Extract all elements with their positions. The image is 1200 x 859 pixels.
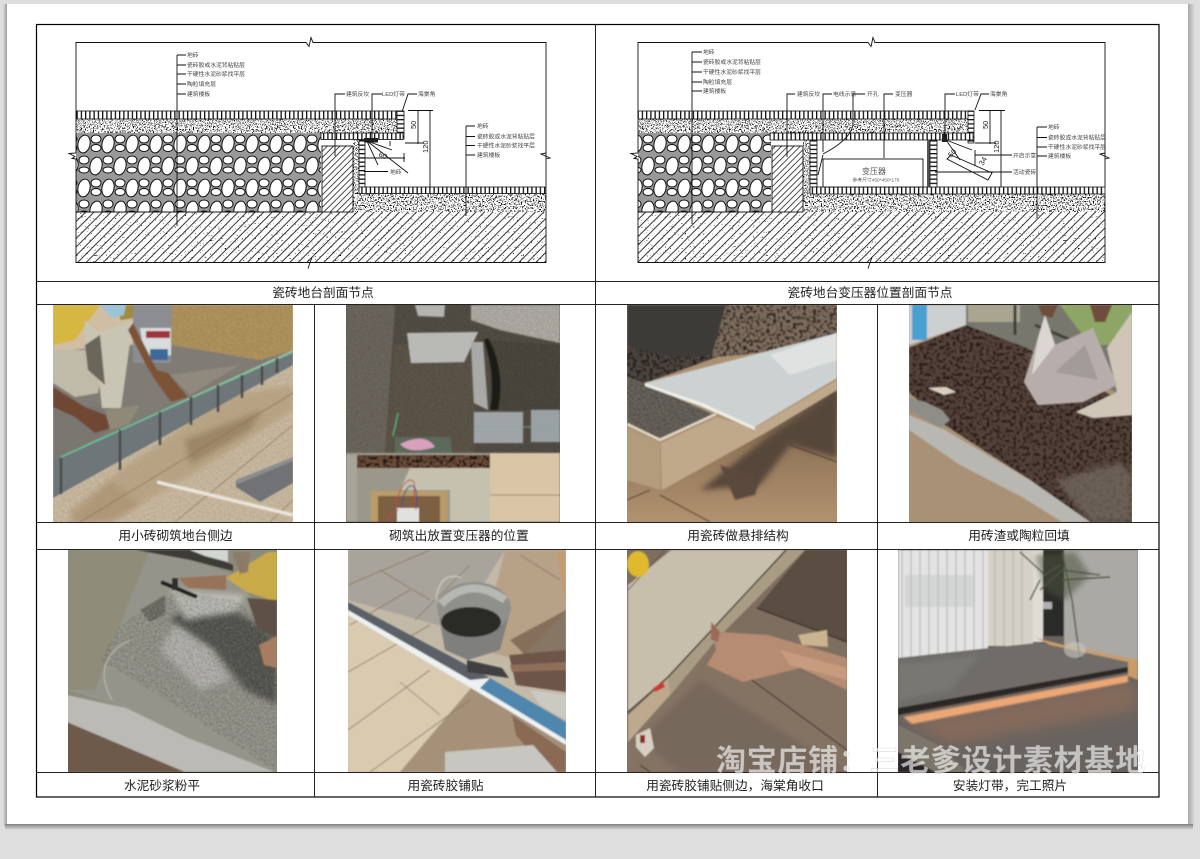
floor glow <box>905 680 1138 745</box>
leader: left layer callouts: 陶粒填充层 <box>187 80 216 88</box>
leader: left layer callouts: 瓷砖胶或水泥背粘贴层 <box>703 58 761 66</box>
dimensions: 50 <box>946 147 958 159</box>
platform top <box>628 550 786 712</box>
worker <box>53 305 100 345</box>
caption row 1: 瓷砖地台剖面节点 <box>272 286 374 300</box>
photo: levelling cement mortar <box>68 550 277 772</box>
grey brick <box>236 457 293 502</box>
photo: backfilling with ceramsite <box>909 305 1132 522</box>
photo: completed platform with LED strip <box>898 550 1138 772</box>
leader: left layer callouts: 干硬性水泥砂浆找平层 <box>703 68 761 76</box>
dimensions: 开启示意 <box>1013 152 1036 160</box>
white tile <box>645 333 837 427</box>
ceramsite <box>909 325 1132 522</box>
tape measure <box>157 482 293 515</box>
kerb stone <box>909 398 950 428</box>
caption row 2 <box>118 528 1070 543</box>
leader: right layer callouts: 地砖 <box>477 122 489 130</box>
dimensions: 60 <box>377 150 389 161</box>
leader: top callouts <box>787 90 1008 175</box>
leader: top callouts: 电线示意 <box>833 90 856 98</box>
leader: top callouts: 建筑反坎 <box>797 90 820 98</box>
caption row 2: 用瓷砖做悬排结构 <box>687 529 789 543</box>
leader: right layer callouts: 建筑楼板 <box>1048 152 1071 160</box>
OSB board <box>171 305 293 360</box>
leader: right layer callouts: 干硬性水泥砂浆找平层 <box>477 142 535 150</box>
sack and legs <box>1076 312 1132 418</box>
tile with adhesive <box>348 602 566 745</box>
dimensions: 120 <box>421 140 430 153</box>
leader: top callouts <box>335 90 436 156</box>
hand and arm <box>707 622 847 690</box>
watermark: 淘宝店铺：三老爹设计素材基地 <box>716 745 1146 778</box>
leader: left layer callouts: 建筑楼板 <box>187 90 210 98</box>
leader: right layer callouts <box>466 122 535 216</box>
photo: tile adhesive application <box>348 550 566 772</box>
dimensions: 120 <box>992 140 1001 153</box>
photo: laying small bricks along platform side <box>53 305 293 522</box>
platform <box>898 643 1128 708</box>
leader: left layer callouts <box>177 51 245 226</box>
leader: left layer callouts: 干硬性水泥砂浆找平层 <box>187 70 245 78</box>
leader: top callouts: 开孔 <box>867 90 879 98</box>
leader: right layer callouts: 瓷砖胶或水泥背粘贴层 <box>477 132 535 140</box>
photo: tile cantilever structure <box>627 305 837 522</box>
leader: right layer callouts: 地砖 <box>1048 123 1060 131</box>
screed <box>53 345 293 460</box>
icon: transformer box: 参考尺寸450*450*170 <box>853 176 900 184</box>
floor stains <box>70 385 293 522</box>
tile and plaster lower <box>490 453 560 522</box>
leader: top callouts: 变压器 <box>895 90 913 98</box>
leader: right layer callouts <box>1037 123 1106 218</box>
caption row 1 <box>272 285 953 300</box>
dimensions: 34 <box>977 155 989 167</box>
leader: left layer callouts: 陶粒填充层 <box>703 78 732 86</box>
bricks <box>53 352 293 498</box>
mortar <box>627 377 717 439</box>
platform side <box>668 550 805 698</box>
dimensions: 地砖 <box>390 168 402 176</box>
caption row 3 <box>124 778 1067 793</box>
floor <box>67 722 185 772</box>
wall glow <box>1036 638 1138 680</box>
photo: transformer position brickwork <box>346 305 560 522</box>
leader: right layer callouts: 瓷砖胶或水泥背粘贴层 <box>1048 134 1106 142</box>
leader: top callouts: 海棠角 <box>990 90 1008 98</box>
leader: top callouts: LED灯带 <box>956 90 979 98</box>
caption row 2: 用砖渣或陶粒回填 <box>968 528 1070 543</box>
upright tiles <box>627 428 660 490</box>
drawing: tile platform transformer section <box>630 36 1110 269</box>
leader: left layer callouts: 地砖 <box>703 48 715 56</box>
caption row 2: 砌筑出放置变压器的位置 <box>389 528 529 543</box>
dimensions: 50 <box>409 121 418 129</box>
leader: right layer callouts: 干硬性水泥砂浆找平层 <box>1048 143 1106 151</box>
caption row 1: 瓷砖地台变压器位置剖面节点 <box>788 285 953 300</box>
caption row 3: 安装灯带，完工照片 <box>953 779 1067 793</box>
caption row 3: 用瓷砖胶铺贴侧边，海棠角收口 <box>646 778 824 793</box>
caption row 2: 用小砖砌筑地台侧边 <box>118 528 233 543</box>
dimensions <box>935 110 1036 187</box>
leader: top callouts: LED灯带 <box>382 90 405 98</box>
section layers <box>638 111 1105 262</box>
dimensions: 活动瓷砖 <box>1013 168 1036 176</box>
dimensions: 50 <box>981 121 990 129</box>
icon: transformer box <box>823 159 923 187</box>
plant and vase <box>1020 552 1110 660</box>
section layers <box>76 111 546 262</box>
drawing: tile platform section <box>68 36 552 269</box>
window <box>136 550 233 571</box>
dimensions <box>364 110 433 187</box>
trowel and hands <box>467 660 509 678</box>
herringbone kerb <box>67 695 275 772</box>
outline with break marks <box>69 38 550 268</box>
leader: right layer callouts: 建筑楼板 <box>477 151 500 159</box>
caption row 3: 水泥砂浆粉平 <box>124 779 200 793</box>
pebbles <box>711 305 837 358</box>
bucket <box>438 610 510 660</box>
wood block <box>798 630 828 647</box>
leader: left layer callouts: 瓷砖胶或水泥背粘贴层 <box>187 61 245 69</box>
photo: edge tile with mitred corner <box>627 550 847 772</box>
outline with break marks <box>631 38 1109 268</box>
pillow <box>898 725 967 772</box>
leader: left layer callouts: 地砖 <box>187 51 199 59</box>
caption row 3: 用瓷砖胶铺贴 <box>407 778 484 793</box>
worker <box>178 575 226 590</box>
leader: top callouts: 海棠角 <box>418 90 436 98</box>
lemon <box>627 551 649 577</box>
leader: left layer callouts: 建筑楼板 <box>703 87 726 95</box>
bucket <box>627 305 726 357</box>
leader: left layer callouts <box>692 48 761 224</box>
icon: transformer box: 变压器 <box>862 166 886 176</box>
leader: top callouts: 建筑反坎 <box>346 90 369 98</box>
